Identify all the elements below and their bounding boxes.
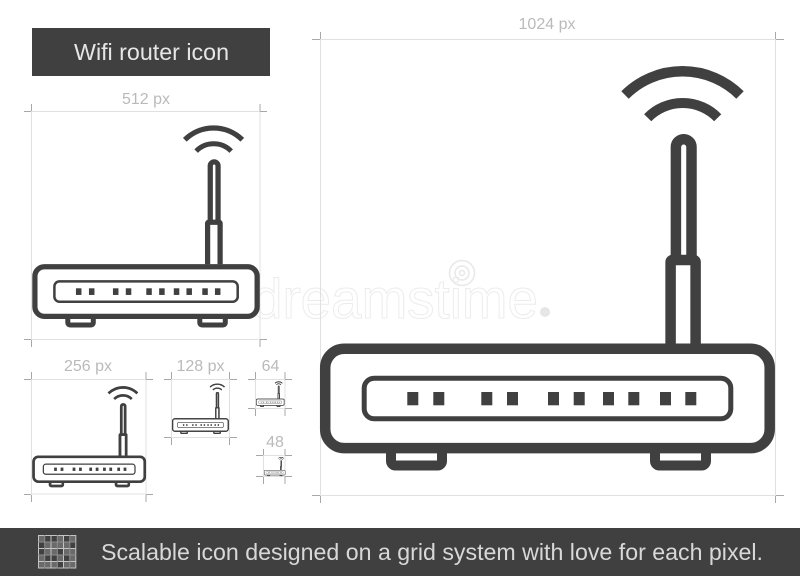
grid frame: 128 px xyxy=(164,372,237,445)
panel: 64 px icon xyxy=(248,358,292,416)
size label: 512 px: 512 px xyxy=(122,91,170,108)
size label: 256 px: 256 px xyxy=(64,358,112,375)
icon: large wifi router xyxy=(325,71,770,466)
grid frame: 256 px xyxy=(24,372,153,502)
icon: 48 px wifi router xyxy=(264,457,285,476)
footer band xyxy=(0,528,800,576)
panel: 48 px icon xyxy=(256,434,292,484)
grid frame: 64 px xyxy=(248,372,292,416)
panel: 256 px icon xyxy=(24,358,153,502)
icon: 256 px wifi router xyxy=(34,387,145,486)
icon: pixel grid xyxy=(38,535,76,568)
size label: 48: 48 xyxy=(266,434,284,451)
watermark: dreamstime xyxy=(252,267,538,330)
title xyxy=(32,28,270,76)
icon: 64 px wifi router xyxy=(256,382,284,406)
icon: 512 px wifi router xyxy=(35,128,257,325)
title: Wifi router icon xyxy=(74,39,229,65)
panel: 512 px icon xyxy=(24,91,267,347)
size label: 128 px: 128 px xyxy=(176,358,225,375)
grid frame: 512 px xyxy=(24,104,267,347)
size label: 64: 64 xyxy=(262,358,280,375)
grid frame: 48 px xyxy=(256,449,292,484)
icon: 128 px wifi router xyxy=(173,384,228,433)
panel: 128 px icon xyxy=(164,358,237,445)
size label: 1024 px: 1024 px xyxy=(519,16,575,33)
footer tagline: Scalable icon designed on a grid system with love for each pixel. xyxy=(101,539,763,565)
grid frame: 1024 px xyxy=(312,32,784,503)
